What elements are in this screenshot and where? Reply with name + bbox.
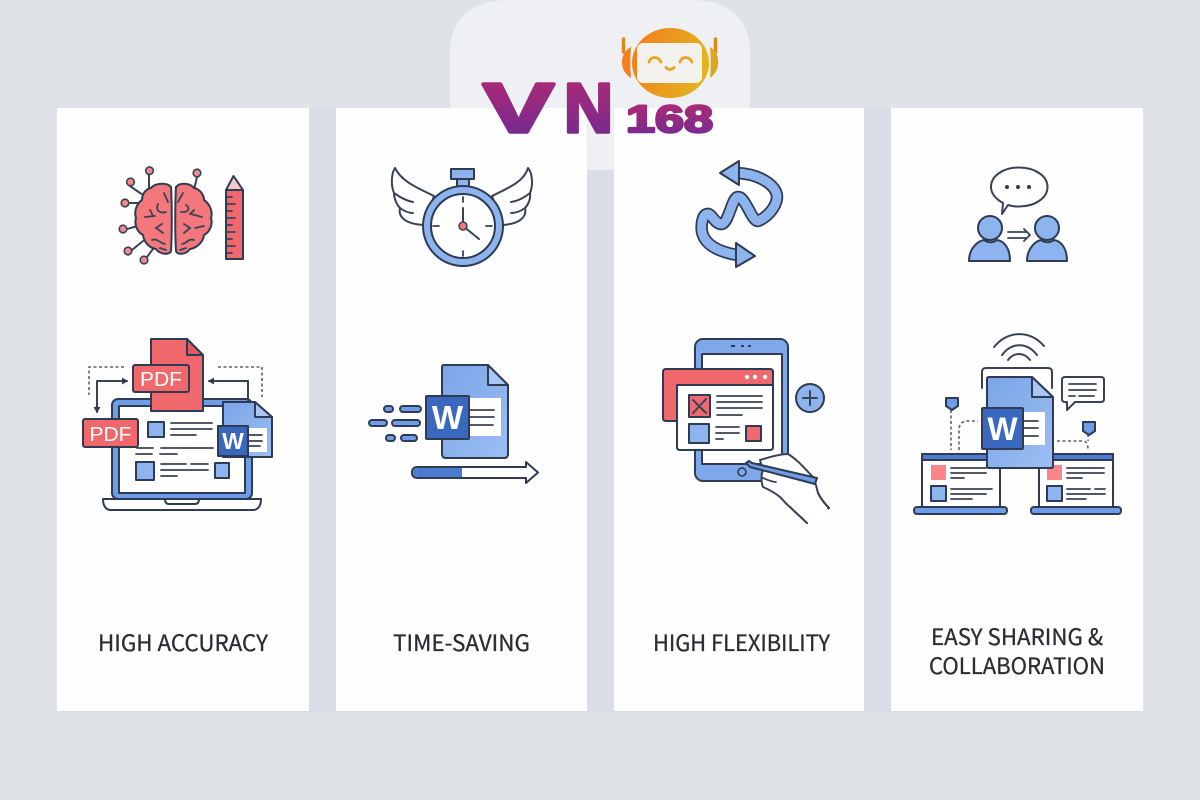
logo wordmark 168: 168 [626, 99, 713, 141]
logo wordmark V: V [483, 69, 554, 147]
label: easy sharing and collaboration [929, 620, 1105, 681]
illustration: shared word document: W [987, 411, 1018, 447]
logo: VN168 robot [483, 28, 718, 147]
illustration: pdf and word on laptop [83, 339, 272, 510]
logo robot mascot [622, 28, 718, 98]
logo wordmark N: N [564, 69, 613, 147]
label: high flexibility: HIGH FLEXIBILITY [653, 626, 830, 658]
illustration: fast word document: W [432, 399, 464, 436]
logo plaque [450, 0, 750, 170]
icon: brain and ruler pencil [119, 167, 243, 264]
icon: two people talking [969, 168, 1067, 261]
icon: winged stopwatch [392, 168, 532, 266]
panel: time-saving [336, 108, 587, 711]
illustration: pdf and word on laptop: W [222, 428, 244, 454]
label: high accuracy: HIGH ACCURACY [98, 626, 268, 658]
illustration: pdf and word on laptop: PDF [90, 423, 132, 446]
gutter tint [57, 108, 1143, 712]
panel: high flexibility [614, 108, 864, 711]
label: time-saving: TIME-SAVING [393, 626, 530, 658]
illustration: shared word document [914, 334, 1121, 514]
illustration: pdf and word on laptop: PDF [140, 368, 182, 391]
illustration: editable tablet and hand [663, 339, 832, 526]
panel: high accuracy [57, 108, 309, 711]
panel: easy sharing and collaboration [891, 108, 1143, 711]
illustration: fast word document [369, 365, 538, 483]
label: easy sharing and collaboration: COLLABORATION [929, 649, 1105, 681]
icon: winding arrows [702, 161, 777, 267]
label: easy sharing and collaboration: EASY SHARING & [931, 620, 1103, 652]
